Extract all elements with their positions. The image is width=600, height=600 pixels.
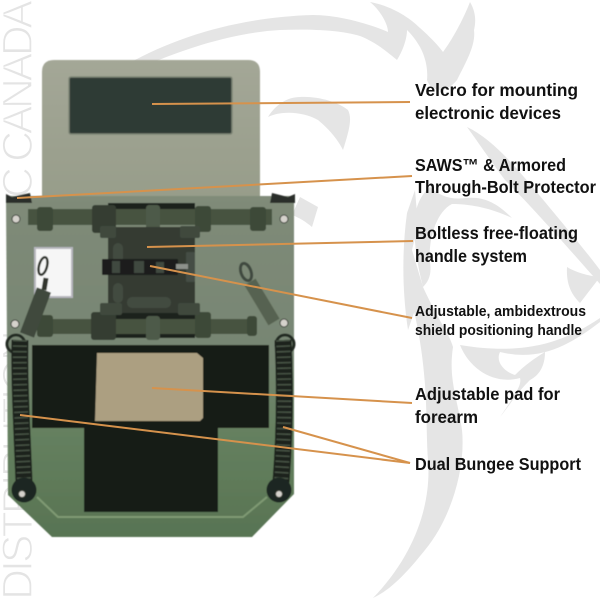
corner protector: left — [6, 193, 32, 203]
label: handle system: handle system — [415, 246, 527, 266]
label: forearm pad — [415, 384, 560, 427]
leader lines — [17, 102, 413, 463]
label: positioning handle: shield positioning handle — [415, 323, 582, 339]
handle plate — [100, 226, 200, 315]
label: handle system: Boltless free-floating — [415, 223, 578, 243]
label: SAWS — [415, 155, 596, 197]
upper velcro patch — [69, 77, 232, 134]
shield illustration — [6, 60, 295, 537]
lower shield body — [6, 196, 294, 537]
label: velcro — [415, 80, 578, 123]
label: positioning handle: Adjustable, ambidextrous — [415, 304, 586, 320]
label: velcro: Velcro for mounting — [415, 80, 578, 100]
lower velcro field — [32, 345, 269, 512]
mounting bolts — [11, 215, 288, 498]
label: forearm pad: Adjustable pad for — [415, 384, 560, 404]
label: positioning handle — [415, 304, 586, 339]
feature labels — [415, 80, 596, 474]
left bungee cord — [7, 256, 49, 502]
upper shield panel — [42, 60, 260, 200]
mounting straps — [28, 203, 272, 340]
white data label — [35, 248, 72, 297]
bottom bevel — [37, 497, 267, 517]
label: forearm pad: forearm — [415, 407, 478, 427]
label: velcro: electronic devices — [415, 103, 561, 123]
label: handle system — [415, 223, 578, 266]
right bungee cord — [238, 262, 294, 502]
label: bungee: Dual Bungee Support — [415, 454, 581, 474]
label: SAWS: SAWS™ & Armored — [415, 155, 566, 175]
forearm pad — [95, 353, 203, 421]
corner protector: right — [270, 193, 295, 203]
